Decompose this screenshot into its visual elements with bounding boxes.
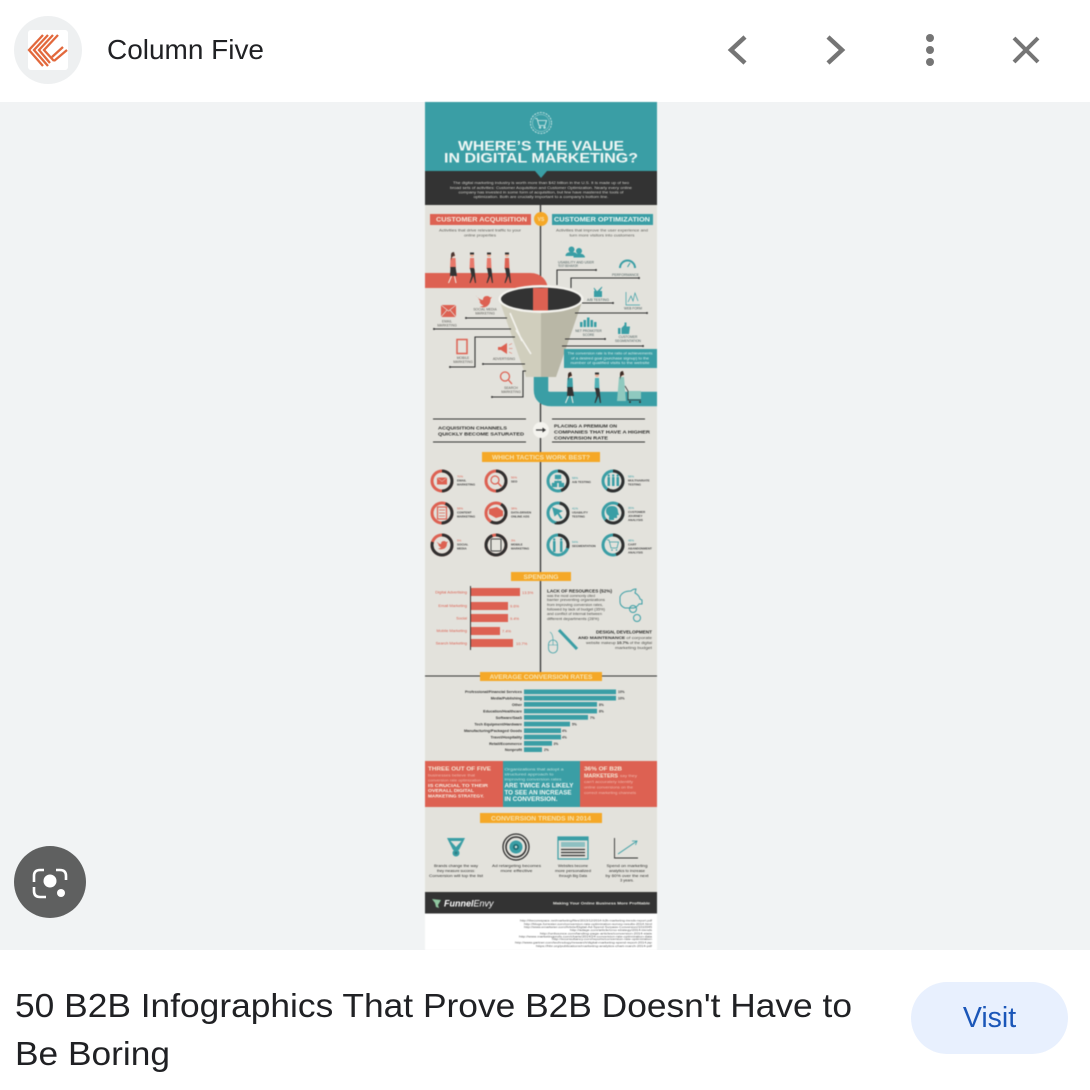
teal pipe	[541, 375, 657, 399]
tactic donut: email	[432, 471, 452, 491]
text: acquisition saturated: QUICKLY BECOME SATURATED	[438, 432, 525, 438]
icon: email	[441, 305, 456, 317]
text: acquisition saturated	[438, 426, 525, 438]
text: premium on conversion	[554, 424, 651, 442]
conversion rate bar chart: 10%	[618, 690, 625, 694]
conversion rate bar chart: Media/Publishing	[491, 696, 523, 700]
header panel	[425, 102, 657, 171]
label: customer segmentation	[615, 335, 642, 343]
text: lack of resources: different departments (28%)	[547, 616, 600, 621]
text: brands	[429, 863, 484, 878]
panel: three out of five: MARKETING STRATEGY.	[428, 794, 484, 798]
heading: customer acquisition: CUSTOMER ACQUISITION	[436, 218, 527, 224]
conversion rate bar chart: 10%	[618, 696, 625, 700]
references: http://unbounce.com/landing-page-articles/conversion-2014-stats	[540, 931, 653, 935]
panel: twice as likely: Organizations that adopt a	[504, 766, 564, 772]
text: design and maintenance	[578, 630, 653, 650]
text: lack of resources: followed by lack of budget (35%)	[547, 606, 606, 612]
acquisition description: online properties	[464, 232, 496, 238]
text: spend on analytics: by 60% over the next	[606, 873, 650, 878]
intro panel: broad sets of activities: Customer Acquisition and Customer Optimization. Nearly every online	[450, 185, 633, 190]
text: lack of resources: barrier preventing organizations	[547, 597, 605, 602]
heading: average conversion rates	[480, 672, 602, 681]
label: a/b testing: A/B TESTING	[587, 298, 609, 302]
label: social media	[473, 308, 497, 316]
intro panel: company has invested in some form of acquisition, but few have mastered the tools of	[458, 190, 624, 194]
tactic label: cart abandonment: 48%	[628, 538, 634, 542]
spending bar chart: 10.7%	[516, 641, 528, 646]
intro panel: The digital marketing industry is worth more than $42 billion in the U.S. It is made up of two	[453, 180, 630, 185]
caption title: Be Boring	[15, 1035, 170, 1072]
caption title: 50 B2B Infographics That Prove B2B Doesn't Have to	[15, 987, 852, 1024]
label: email marketing: MARKETING	[437, 324, 457, 328]
conversion rate bar chart: 8%	[599, 710, 604, 714]
tactic label: data-driven: ONLINE ADS	[511, 514, 529, 518]
acquisition description: Activities that drive relevant traffic to your	[439, 228, 522, 232]
conversion rate bar chart	[464, 690, 625, 752]
tagline: Making Your Online Business More Profitable	[553, 900, 651, 906]
label: net promoter score: NET PROMOTER	[575, 329, 602, 333]
label: performance: PERFORMANCE	[612, 273, 640, 277]
callout: conversion rate definition	[564, 349, 657, 368]
label: usability: USABILITY AND USER	[558, 260, 595, 264]
icon: shopping cart	[625, 386, 641, 403]
spending bar chart: 9.4%	[510, 616, 520, 621]
label: mobile marketing: MOBILE	[457, 356, 470, 360]
icon: target	[503, 834, 529, 860]
text: brands: they measure success:	[437, 868, 475, 873]
red pipe	[425, 280, 540, 312]
icon: line chart	[626, 292, 640, 305]
text: ad retargeting	[492, 863, 541, 873]
callout: conversion rate definition: of a desired goal (purchase signup) to the	[571, 356, 649, 360]
text: brands: Conversion will top the list	[429, 873, 484, 878]
text: lack of resources	[547, 588, 613, 621]
tactic label: email: MARKETING	[457, 482, 476, 486]
panel: twice as likely	[503, 761, 580, 807]
text: ad retargeting: Ad retargeting becomes	[492, 863, 541, 868]
heading: conversion trends	[480, 813, 602, 823]
tactic label: seo	[511, 476, 518, 484]
text: premium on conversion: CONVERSION RATE	[554, 436, 609, 442]
acquisition description	[439, 228, 522, 238]
text: premium on conversion: PLACING A PREMIUM ON	[554, 424, 618, 430]
spending bar chart: Email Marketing	[438, 603, 467, 608]
tactic donut: segmentation	[548, 535, 568, 555]
intro panel: optimization. Both are crucially important to a company's bottom line.	[474, 194, 608, 199]
funnel	[498, 285, 584, 377]
label: email marketing: EMAIL	[442, 320, 452, 324]
tactic label: mobile	[511, 538, 530, 550]
heading: spending: SPENDING	[524, 575, 559, 581]
conversion rate bar chart: Manufacturing/Packaged Goods	[464, 729, 522, 733]
tactic donut: data-driven	[482, 499, 510, 527]
callout: conversion rate definition: number of qualified visits to the website	[570, 361, 650, 365]
text: spend on analytics	[606, 863, 650, 882]
spending bar chart: Digital Advertising	[435, 590, 467, 594]
tactic label: data-driven: DATA-DRIVEN	[511, 510, 531, 514]
conversion rate bar chart: Travel/Hospitality	[491, 736, 523, 740]
panel: three out of five: OVERALL DIGITAL	[428, 788, 474, 793]
tactic label: content	[457, 506, 476, 518]
tactic donut: seo	[486, 471, 506, 491]
tactic label: multivariate: 58%	[628, 474, 634, 478]
references: http://www.gartner.com/technology/research/digital-marketing-spend-report-2014.jsp	[515, 940, 652, 944]
references: http://www.emarketer.com/Article/Digital-Ad-Spend-Surpass-Conversion/1010345	[524, 925, 652, 929]
conversion rate bar chart: 4%	[562, 729, 567, 733]
tactic label: segmentation	[572, 540, 596, 548]
tactic label: mobile: MOBILE	[511, 542, 523, 546]
text: design and maintenance: DESIGN, DEVELOPMENT	[596, 630, 652, 634]
panel: 36% of b2b marketers: 36% OF B2B	[584, 766, 622, 772]
label: mobile marketing: MARKETING	[453, 360, 473, 364]
heading: spending	[511, 572, 571, 581]
icon: twitter bird	[476, 296, 492, 307]
center divider	[540, 205, 542, 676]
tactic label: content: CONTENT	[457, 510, 472, 514]
conversion rate bar chart: Professional/Financial Services	[465, 690, 522, 694]
vs badge: VS	[538, 217, 545, 223]
heading: tactics	[482, 452, 600, 462]
spending bar chart: 13.5%	[522, 590, 534, 595]
visit button: Visit	[963, 1002, 1016, 1034]
heading: customer optimization: CUSTOMER OPTIMIZATION	[554, 218, 650, 224]
spending bar chart: 9.6%	[510, 604, 520, 608]
tactic label: segmentation: 54%	[572, 540, 578, 544]
icon: column five avatar	[14, 16, 82, 84]
references	[425, 914, 657, 950]
tactic label: cart abandonment: CART	[628, 542, 636, 546]
references: http://blogs.forrester.com/conversion-rate-optimization-survey-results-2014.html	[524, 922, 652, 926]
tactic donut: social	[432, 535, 452, 555]
icon: users	[566, 246, 585, 258]
label: net promoter score	[575, 329, 602, 337]
tactic label: seo: SEO	[511, 480, 518, 484]
references: http://adage.com/article/cmo-strategy/2014-trends	[570, 928, 653, 932]
callout: conversion rate definition: The conversion rate is the ratio of achievements	[568, 352, 653, 356]
tactic label: social: 5%	[457, 538, 462, 542]
tactic label: cart abandonment: ABANDONMENT	[628, 546, 652, 550]
icon: mouse and pencil	[548, 630, 577, 653]
tactic donut: cart abandonment	[603, 535, 623, 555]
tactic label: usability: TESTING	[572, 514, 586, 518]
spending bar chart	[435, 586, 534, 650]
tactic label: a/b testing: A/B TESTING	[572, 480, 592, 484]
rule lines	[433, 419, 645, 442]
panel: twice as likely: ARE TWICE AS LIKELY	[504, 784, 574, 790]
text: ad retargeting: more effective	[500, 868, 533, 873]
icon: previous	[731, 37, 745, 63]
icon: cart badge	[530, 112, 552, 134]
heading: customer acquisition	[430, 214, 531, 225]
spending bar chart: Social	[456, 616, 467, 620]
references: http://econsultancy.com/reports/conversion-rate-optimization	[552, 937, 652, 941]
heading: tactics: WHICH TACTICS WORK BEST?	[492, 456, 590, 462]
logo: funnelenvy: FunnelEnvy	[444, 898, 494, 908]
label: social media: SOCIAL MEDIA	[473, 308, 497, 312]
label: search marketing: MARKETING	[501, 390, 521, 394]
title: WHERE’S THE VALUE	[458, 138, 624, 154]
icon: close	[1014, 38, 1038, 62]
icon: thumb up	[618, 322, 630, 334]
panel: three out of five: IS CRUCIAL TO THEIR	[428, 783, 489, 788]
tactic label: multivariate: TESTING	[628, 482, 642, 486]
text: websites personalized: Websites become	[558, 863, 589, 868]
tactic label: a/b testing: 58%	[572, 476, 578, 480]
panel: twice as likely: TO SEE AN INCREASE	[504, 790, 572, 796]
icon: visual search button	[14, 846, 86, 918]
conversion rate bar chart: 3%	[554, 742, 558, 746]
conversion rate bar chart: 5%	[572, 722, 577, 726]
title: IN DIGITAL MARKETING?	[444, 150, 638, 166]
text: design and maintenance: website makeup 10.7% of the digital	[586, 640, 652, 645]
panel: three out of five: conversion rate optimization	[428, 778, 481, 782]
label: social media: MARKETING	[475, 312, 495, 316]
heading: average conversion rates: AVERAGE CONVERSION RATES	[490, 675, 592, 681]
panel: three out of five: businesses believe that	[428, 772, 476, 778]
tactic label: usability: USABILITY	[572, 510, 588, 514]
icon: tablet	[457, 340, 467, 354]
tactic label: email: 70%	[457, 474, 463, 478]
icon: bar chart	[580, 318, 596, 327]
text: lack of resources: was the most commonly cited	[547, 593, 595, 598]
tactic label: segmentation: SEGMENTATION	[572, 544, 596, 548]
icon: gauge	[620, 260, 635, 268]
tactic label: multivariate: MULTIVARIATE	[628, 478, 650, 482]
panel: 36% of b2b marketers: can't accurately identify	[584, 779, 633, 784]
icon: megaphone	[498, 343, 512, 354]
tactic donut: customer journey	[599, 499, 627, 527]
tactic donut: multivariate	[603, 471, 623, 491]
text: websites personalized	[555, 863, 591, 878]
tactic donut: mobile	[486, 535, 506, 555]
intro panel	[425, 171, 657, 205]
optimization connector lines	[557, 269, 648, 347]
divider rule	[425, 675, 657, 677]
tactic donut: usability	[546, 501, 570, 525]
tactic label: social	[457, 538, 469, 550]
tactic label: usability: 41%	[572, 506, 578, 510]
references: http://thecorespace.net/marketing/files/2013/12/2014-b2b-marketing-trends-report.pdf	[520, 918, 652, 922]
panel: twice as likely: IN CONVERSION.	[504, 797, 558, 803]
text: websites personalized: through Big Data	[559, 873, 588, 878]
text: spend on analytics: analytics to increase	[609, 868, 646, 873]
icon: piggy bank	[620, 589, 642, 622]
source name: Column Five	[107, 34, 264, 65]
conversion rate bar chart: Education/Healthcare	[483, 710, 522, 714]
optimization description: Activities that improve the user experience and	[556, 228, 648, 232]
text: design and maintenance: AND MAINTENANCE of corporate	[578, 635, 652, 640]
title	[444, 138, 638, 166]
people: coral walkers	[448, 252, 511, 283]
icon: next	[828, 37, 842, 63]
text: premium on conversion: COMPANIES THAT HAVE A HIGHER	[554, 430, 651, 436]
tactic label: content: 58%	[457, 506, 463, 510]
label: usability: TEST BEHAVIOR	[558, 264, 578, 268]
label: search marketing	[501, 386, 521, 394]
conversion rate bar chart: 4%	[562, 736, 567, 740]
references: http://www.marketingprofs.com/charts/2014/24-conversion-rate-optimization-data	[519, 934, 652, 938]
panel: three out of five: THREE OUT OF FIVE	[428, 766, 491, 772]
label: web form: WEB FORM	[624, 306, 642, 310]
text: spend on analytics: Spend on marketing	[606, 863, 648, 868]
visit button	[911, 982, 1068, 1054]
arrow badge	[533, 422, 549, 438]
label: email marketing	[437, 320, 457, 328]
tactic label: data-driven: 38%	[511, 506, 517, 510]
tactic label: social: MEDIA	[457, 546, 468, 550]
tactic donut: a/b testing	[548, 471, 568, 491]
vs badge	[534, 212, 548, 226]
acquisition connector lines	[433, 317, 526, 398]
footer band	[425, 892, 657, 914]
conversion rate bar chart: Other	[512, 703, 523, 707]
tactic label: email: EMAIL	[457, 478, 466, 482]
icon: more	[926, 34, 934, 66]
tactic label: mobile: 3%	[511, 538, 516, 542]
tactic label: a/b testing	[572, 476, 592, 484]
panel: three out of five	[425, 761, 503, 807]
tactic label: cart abandonment	[628, 538, 652, 554]
label: advertising: ADVERTISING	[493, 357, 516, 361]
tactic label: customer journey	[628, 506, 646, 522]
tactic label: mobile: MARKETING	[511, 546, 530, 550]
optimization description	[556, 228, 648, 238]
tactic label: cart abandonment: ANALYSIS	[628, 550, 643, 554]
icon: checkmark	[594, 287, 602, 297]
conversion rate bar chart: Tech Equipment/Hardware	[474, 722, 522, 726]
label: net promoter score: SCORE	[583, 333, 595, 337]
tactic label: usability	[572, 506, 588, 518]
icon: trend chart	[614, 838, 638, 858]
tactic label: seo: 56%	[511, 476, 517, 480]
tactic label: customer journey: 35%	[628, 506, 634, 510]
panel: twice as likely: structured approach to	[504, 772, 554, 776]
conversion rate bar chart: Software/SaaS	[496, 716, 522, 720]
text: brands: Brands change the way	[434, 863, 478, 868]
text: acquisition saturated: ACQUISITION CHANNELS	[438, 426, 508, 432]
panel: 36% of b2b marketers: say they	[620, 773, 637, 778]
panel: twice as likely: improving conversion rates	[504, 776, 562, 782]
icon: browser	[558, 837, 588, 859]
tactic donut: content	[429, 500, 455, 526]
panel: 36% of b2b marketers: online conversions on the	[584, 784, 634, 790]
spending bar chart: 7.4%	[502, 628, 512, 634]
conversion rate bar chart: 2%	[544, 748, 549, 752]
optimization description: turn more visitors into customers	[570, 232, 634, 238]
tactic label: email	[457, 474, 476, 486]
label: usability	[558, 260, 595, 268]
heading: customer optimization	[552, 214, 653, 225]
people: teal walkers	[566, 371, 641, 403]
label: mobile marketing	[453, 356, 473, 364]
text: lack of resources: from improving conversion rates,	[547, 602, 603, 607]
tactic label: multivariate	[628, 474, 650, 486]
tactic label: data-driven	[511, 506, 531, 518]
text: spend on analytics: 3 years.	[620, 878, 634, 882]
tactic label: customer journey: ANALYSIS	[628, 518, 643, 522]
text: websites personalized: more personalized	[555, 868, 591, 873]
tactic label: content: MARKETING	[457, 514, 476, 518]
text: lack of resources: and conflict of internal between	[547, 611, 602, 616]
label: customer segmentation: CUSTOMER	[619, 335, 638, 339]
icon: medal	[447, 838, 465, 856]
tactic label: customer journey: JOURNEY	[628, 514, 643, 518]
heading: conversion trends: CONVERSION TRENDS IN 2014	[491, 816, 592, 822]
text: lack of resources: LACK OF RESOURCES (52%)	[547, 588, 613, 594]
references: https://hbr.org/publications/marketing-analytics-chart-march-2014-pdf	[536, 944, 652, 948]
label: customer segmentation: SEGMENTATION	[615, 339, 642, 343]
top bar	[0, 0, 1090, 102]
panel: 36% of b2b marketers	[580, 761, 657, 807]
conversion rate bar chart: Retail/Ecommerce	[489, 742, 522, 746]
infographic	[425, 102, 657, 950]
icon: magnifier	[500, 372, 512, 384]
tactic label: social: SOCIAL	[457, 542, 469, 546]
label: search marketing: SEARCH	[504, 386, 518, 390]
conversion rate bar chart: Nonprofit	[505, 748, 523, 752]
caption title	[15, 987, 852, 1072]
panel: 36% of b2b marketers: MARKETERS	[584, 774, 618, 780]
text: design and maintenance: marketing budget	[615, 645, 653, 650]
spending bar chart: Search Marketing	[436, 640, 467, 646]
panel: 36% of b2b marketers: correct marketing channels	[584, 790, 636, 795]
conversion rate bar chart: 8%	[599, 703, 604, 707]
spending bar chart: Mobile Marketing	[437, 628, 467, 633]
conversion rate bar chart: 7%	[590, 716, 595, 720]
tactic label: customer journey: CUSTOMER	[628, 510, 646, 514]
